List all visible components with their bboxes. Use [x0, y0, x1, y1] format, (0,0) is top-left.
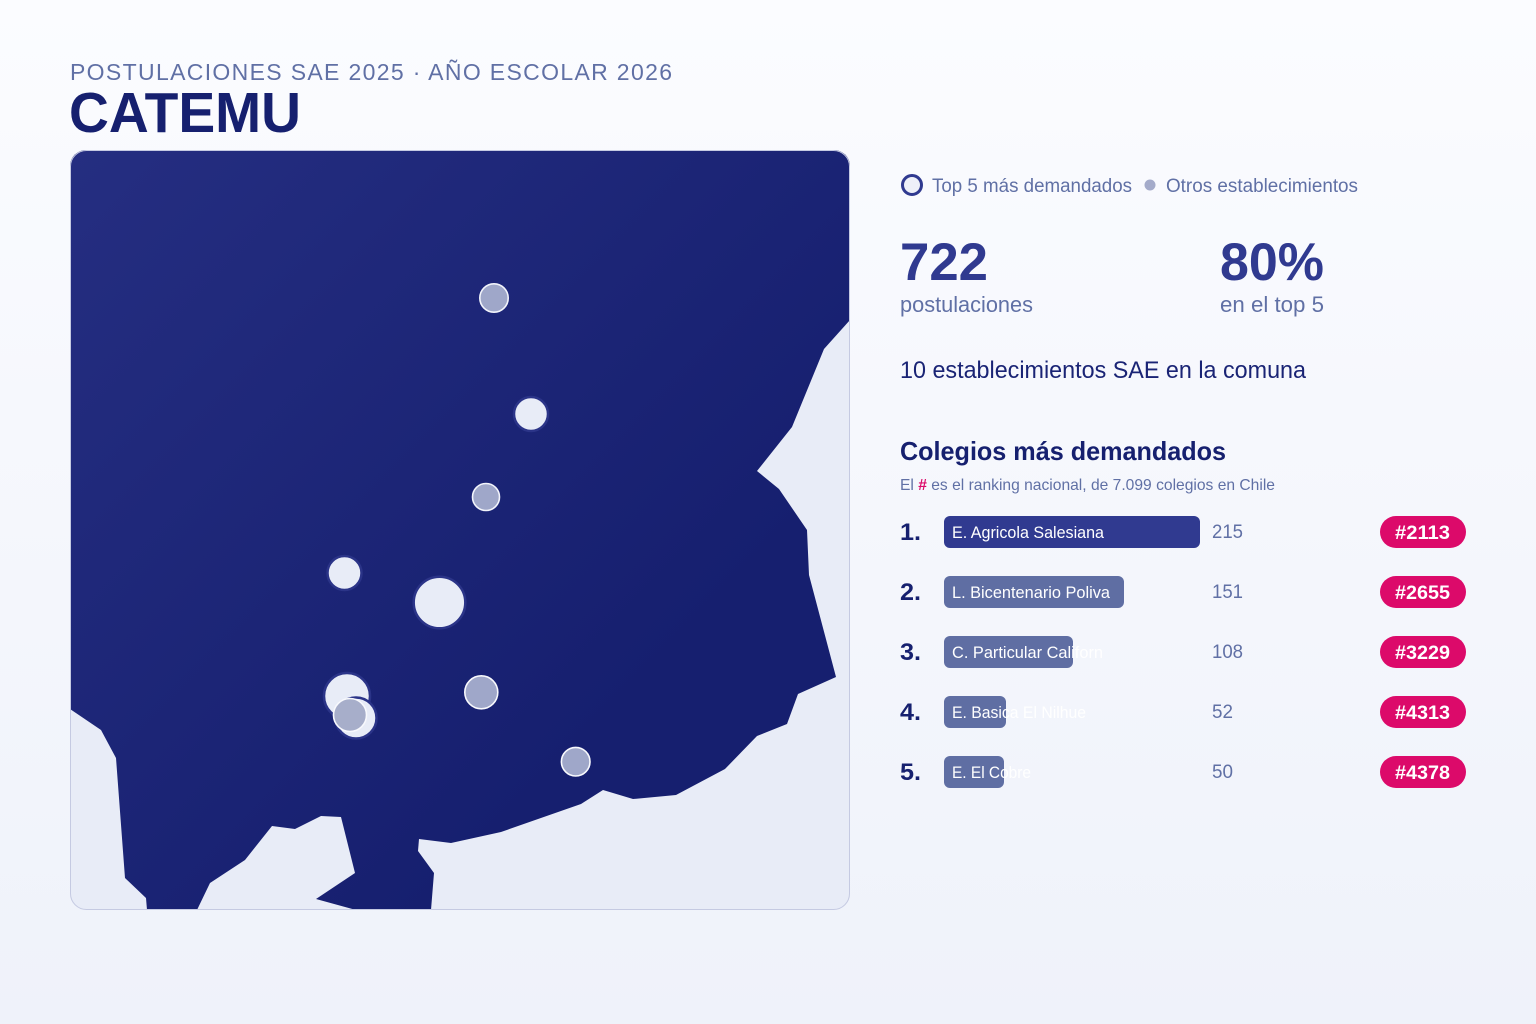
row 4: #4313 [1395, 703, 1450, 724]
subtitle: POSTULACIONES SAE 2025 · AÑO ESCOLAR 2026 [70, 59, 672, 85]
legend label: top 5: Top 5 más demandados [932, 176, 1132, 197]
row 5: #4378 [1395, 763, 1450, 784]
row 1 [900, 516, 1466, 548]
marker: other school [480, 284, 508, 312]
row 5 [900, 756, 1466, 788]
marker: other school [334, 698, 366, 732]
title: CATEMU [69, 81, 301, 145]
row 5: 50 [1212, 762, 1233, 783]
marker: top school [336, 698, 376, 738]
legend icon: top 5 [902, 176, 922, 194]
heading: ranking: Colegios más demandados [900, 436, 1226, 466]
marker: other school [561, 747, 590, 776]
stat: share in top 5: en el top 5 [1220, 292, 1324, 317]
marker: other school [465, 676, 498, 709]
header [69, 59, 672, 145]
row 3 [900, 636, 1466, 668]
row 4: E. Basica El Nilhue [952, 703, 1086, 722]
stat: postulaciones [900, 233, 1033, 317]
infographic [70, 60, 1466, 910]
row 1: 1. [900, 519, 921, 546]
marker: top school [324, 673, 370, 719]
stat: postulaciones: 722 [900, 233, 988, 292]
row 3: C. Particular Californ [952, 643, 1103, 662]
row 1: E. Agricola Salesiana [952, 523, 1105, 542]
row 4: 52 [1212, 702, 1233, 723]
panel: map [70, 150, 850, 910]
row 4 [900, 696, 1466, 728]
row 5: 5. [900, 759, 921, 786]
legend icon: others [1144, 180, 1156, 190]
legend [902, 176, 1358, 197]
row 2: 2. [900, 579, 921, 606]
stat: postulaciones: postulaciones [900, 292, 1033, 317]
row 2: L. Bicentenario Poliva [952, 583, 1111, 602]
stat: share in top 5: 80% [1220, 233, 1324, 292]
row 3: 108 [1212, 642, 1243, 663]
row 1: 215 [1212, 522, 1243, 543]
marker: other school [472, 484, 500, 510]
marker: top school [328, 556, 362, 590]
row 3: 3. [900, 639, 921, 666]
marker: top school [514, 397, 548, 431]
row 2: #2655 [1395, 583, 1450, 604]
row 5: E. El Cobre [952, 763, 1031, 782]
row 3: #3229 [1395, 643, 1450, 664]
marker: top school largest [414, 577, 465, 628]
row 2 [900, 576, 1466, 608]
legend label: others: Otros establecimientos [1166, 176, 1358, 197]
map: school markers [324, 284, 590, 776]
row 2: 151 [1212, 582, 1243, 603]
stat: share in top 5 [1220, 233, 1324, 317]
note: ranking explanation: El # es el ranking nacional, de 7.099 colegios en Chile [900, 477, 1275, 494]
row 1: #2113 [1395, 523, 1450, 544]
ranking list [900, 516, 1466, 788]
row 4: 4. [900, 699, 921, 726]
text: number of schools: 10 establecimientos SAE en la comuna [900, 357, 1307, 384]
map: commune shape [70, 150, 850, 910]
